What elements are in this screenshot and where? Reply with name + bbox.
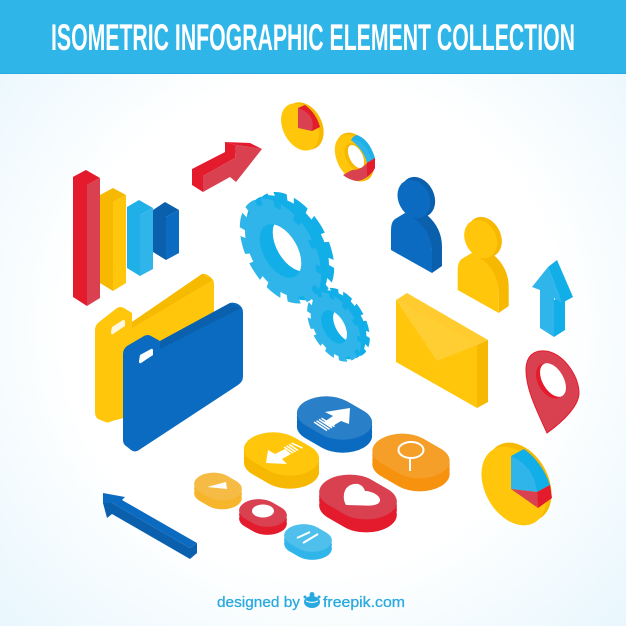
bar chart — [73, 170, 179, 306]
blue arrow button — [285, 389, 384, 460]
icon: blue person — [391, 171, 442, 273]
icon: yellow person — [458, 211, 509, 313]
footer credit: freepik.com — [323, 594, 405, 611]
header banner — [0, 0, 626, 74]
icon: blue long arrow — [103, 493, 197, 559]
icon: small gear — [307, 288, 370, 362]
icon: record — [252, 504, 274, 518]
icon: yellow folder — [95, 274, 214, 422]
small pause button — [276, 520, 340, 564]
icon: play — [207, 482, 227, 489]
icon: magnifier — [398, 442, 424, 471]
icon: large pie chart — [468, 431, 565, 537]
blue folder tab — [139, 349, 153, 363]
icon: red arrow — [192, 142, 262, 192]
icon: arrow up-right — [314, 408, 350, 430]
icon: blue folder — [123, 303, 243, 452]
icon: small pie chart — [274, 96, 331, 157]
icon: map pin — [526, 351, 579, 433]
footer credit — [217, 592, 405, 611]
icon: arrow down-left — [266, 443, 302, 464]
icon: large gear — [240, 192, 334, 304]
icon: freepik logo — [304, 592, 320, 608]
footer credit: designed by — [217, 594, 301, 611]
icon: envelope — [396, 293, 488, 408]
small play button — [186, 468, 250, 514]
icon: heart — [344, 484, 380, 506]
yellow arrow button — [232, 425, 331, 496]
icon: up arrow — [532, 260, 573, 337]
icon: pause — [297, 532, 318, 543]
orange search button — [360, 426, 462, 498]
icon: donut chart — [327, 126, 382, 188]
red heart button — [306, 467, 410, 540]
small record button — [231, 494, 295, 540]
yellow folder tab — [111, 320, 125, 334]
